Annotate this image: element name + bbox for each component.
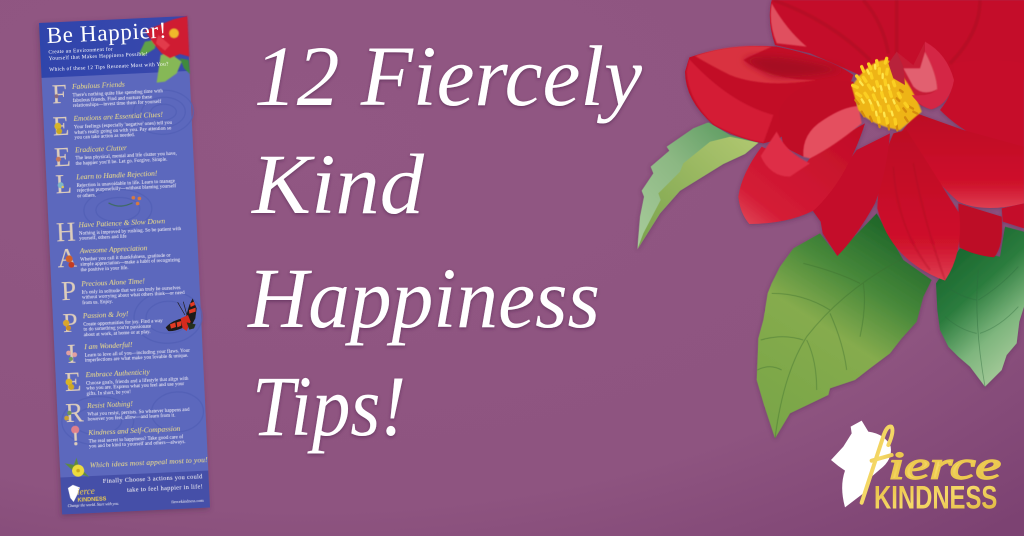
tip 2: what's really going on with you. Pay attention so bbox=[74, 126, 172, 136]
tip 7: from us. Enjoy. bbox=[82, 300, 113, 306]
leaf: lower right bbox=[936, 227, 1024, 387]
footer mini logo: ierce bbox=[77, 486, 95, 497]
petal: far right upper bbox=[940, 60, 1024, 148]
petal: top back bbox=[770, 0, 1024, 87]
tip 6: the positive in your life. bbox=[81, 266, 129, 273]
tip 4: L bbox=[55, 169, 73, 199]
tip 1: Fabulous Friends bbox=[71, 80, 125, 91]
icon: butterfly bbox=[166, 298, 197, 331]
logo lion mark bbox=[831, 421, 891, 507]
tip 6: A bbox=[57, 242, 78, 273]
tip 8: P bbox=[62, 308, 78, 338]
tip 3 bbox=[53, 137, 177, 172]
tip 6: Whether you call it thankfulness, gratitude or bbox=[80, 253, 171, 263]
headline line 1: 12 Fiercely bbox=[254, 28, 643, 124]
icon: small sprig bbox=[108, 196, 141, 207]
tip 4: or others. bbox=[77, 194, 96, 199]
petal: bottom centre bbox=[877, 130, 960, 281]
petal: bottom left tip bbox=[813, 133, 890, 256]
tip 10 bbox=[64, 361, 190, 398]
tip 10: E bbox=[64, 366, 82, 397]
stamen bbox=[852, 58, 922, 130]
headline line 3: Happiness bbox=[247, 250, 600, 346]
tip 4: Learn to Handle Rejection! bbox=[75, 169, 158, 181]
tip 7: without worrying about what others think—or need bbox=[82, 291, 185, 301]
tip 8: Passion & Joy! bbox=[82, 309, 129, 320]
tip 9: imperfections are what make you lovable & unique. bbox=[85, 354, 189, 364]
headline line 2: Kind bbox=[250, 136, 425, 232]
tip 7 bbox=[60, 270, 185, 307]
tip 11: however you feel, allow—and learn from it. bbox=[88, 414, 176, 423]
card intro lines: Which of these 12 Tips Resonate Most with You? bbox=[49, 60, 169, 73]
tip 10: gifts. In short, be you! bbox=[86, 390, 131, 397]
tip 1 bbox=[51, 74, 164, 110]
tip 8: Create opportunities for joy. Find a way bbox=[83, 319, 163, 328]
closing question: Which ideas most appeal most to you! bbox=[90, 455, 208, 470]
illustration: red dahlia with leaves bbox=[637, 0, 1024, 438]
tip 2: E bbox=[52, 111, 70, 141]
petal: lower left bbox=[738, 123, 865, 224]
tip 1: F bbox=[51, 79, 68, 109]
tip 11 bbox=[63, 392, 191, 428]
tip 12: The real secret to happiness? Take good care of bbox=[89, 435, 184, 445]
petal: centre left fold bbox=[778, 80, 857, 157]
tip 9: I am Wonderful! bbox=[83, 340, 133, 351]
tip 7: It's only in solitude that we can truly be ourselves bbox=[82, 286, 181, 296]
logo letter f bbox=[862, 426, 892, 503]
petal: curl bbox=[887, 42, 954, 109]
card header band bbox=[39, 16, 189, 78]
footer mini logo: KINDNESS bbox=[77, 496, 107, 504]
icon: small card flower bbox=[139, 16, 190, 83]
tip 3: Eradicate Clutter bbox=[74, 143, 127, 154]
tip 4: rejection purposefully—without blaming yourself bbox=[77, 184, 177, 194]
tip 11: R bbox=[65, 397, 84, 428]
tip 2 bbox=[52, 106, 173, 142]
tip 3: E bbox=[53, 142, 71, 172]
footer tagline: Change the world. Start with you. bbox=[68, 502, 119, 508]
tip 10: who you are. Express what you feel and use your bbox=[86, 382, 185, 392]
tip 12 bbox=[71, 421, 186, 451]
tip 11: What you resist, persists. So whatever happens and bbox=[87, 408, 190, 418]
footer call to action: take to feel happier in life! bbox=[127, 483, 203, 494]
tip 5: yourself, others and life bbox=[79, 235, 127, 242]
card intro lines bbox=[48, 43, 169, 73]
tip 3: the happier you'll be. Let go. Forgive. Simple. bbox=[76, 158, 168, 167]
tip 7: P bbox=[60, 276, 77, 306]
main headline bbox=[247, 28, 643, 454]
card intro lines: Create an Environment for bbox=[48, 46, 113, 56]
card intro lines: Yourself that Makes Happiness Possible! bbox=[49, 50, 148, 62]
leaf: large lower bbox=[757, 213, 932, 438]
petal: left large bbox=[685, 46, 853, 143]
logo: Fierce Kindness bbox=[831, 421, 1001, 516]
card heading and intro bbox=[46, 17, 169, 73]
tip 8: about at work, at home or at play. bbox=[84, 330, 151, 338]
tip 10: Embrace Authenticity bbox=[84, 367, 151, 379]
footer call to action: Finally Choose 3 actions you could bbox=[103, 473, 203, 485]
panel: tips bookmark card bbox=[39, 16, 212, 514]
tip 5: Nothing is improved by rushing. So be patient with bbox=[79, 227, 182, 237]
tip 9: Learn to love all of you—including your flaws. Your bbox=[85, 349, 190, 359]
tip 5 bbox=[55, 212, 182, 247]
tip 9 bbox=[66, 333, 191, 369]
tip 8 bbox=[62, 303, 164, 339]
tip 9: I bbox=[66, 339, 77, 369]
tip 4: Rejection is unavoidable in life. Learn to manage bbox=[77, 179, 175, 189]
footer call to action bbox=[103, 473, 204, 495]
tip 2: Emotions are Essential Clues! bbox=[72, 110, 164, 123]
tip 8: to do something you're passionate bbox=[83, 325, 151, 333]
tip 1: relationships—invest time them for yourself bbox=[73, 100, 162, 109]
footer mini logo bbox=[68, 483, 107, 504]
headline line 4: Tips! bbox=[252, 358, 406, 454]
card title: Be Happier! bbox=[46, 18, 167, 48]
leaf: upper left bbox=[637, 122, 758, 249]
tip 10: Choose goals, friends and a lifestyle that align with bbox=[86, 377, 189, 387]
tip 12: you and be kind to yourself and others—always. bbox=[89, 440, 186, 450]
tip 6 bbox=[57, 238, 181, 274]
curl front bbox=[912, 42, 954, 109]
petal: right lower bbox=[900, 113, 1024, 208]
logo word fierce: ierce bbox=[888, 443, 1001, 487]
tip 1: fabulous friends. Find and nurture these bbox=[73, 95, 152, 104]
tip 7: Precious Alone Time! bbox=[80, 276, 146, 288]
tip 2: you can take action as needed. bbox=[74, 133, 135, 141]
tip 12: Kindness and Self-Compassion bbox=[87, 424, 181, 437]
tip 1: There's nothing quite like spending time with bbox=[72, 89, 163, 99]
petals bbox=[685, 0, 1024, 281]
tip 11: Resist Nothing! bbox=[86, 399, 134, 410]
tip 3: The less physical, mental and life clutter you have, bbox=[75, 152, 177, 162]
footer url: fiercekindness.com bbox=[171, 498, 205, 504]
petal: small lower right bbox=[958, 203, 1002, 257]
icon: yellow flower bbox=[65, 457, 89, 478]
tip 6: simple appreciation—make a habit of recognizing bbox=[80, 258, 181, 268]
tip 5: Have Patience & Slow Down bbox=[77, 216, 166, 229]
tip 4 bbox=[55, 164, 177, 200]
tip 5: H bbox=[55, 217, 76, 247]
card footer band bbox=[60, 471, 210, 514]
tip 6: Awesome Appreciation bbox=[79, 243, 148, 255]
card body bbox=[39, 16, 210, 514]
tip 2: Your feelings (especially 'negative' ones) tell you bbox=[74, 121, 173, 130]
